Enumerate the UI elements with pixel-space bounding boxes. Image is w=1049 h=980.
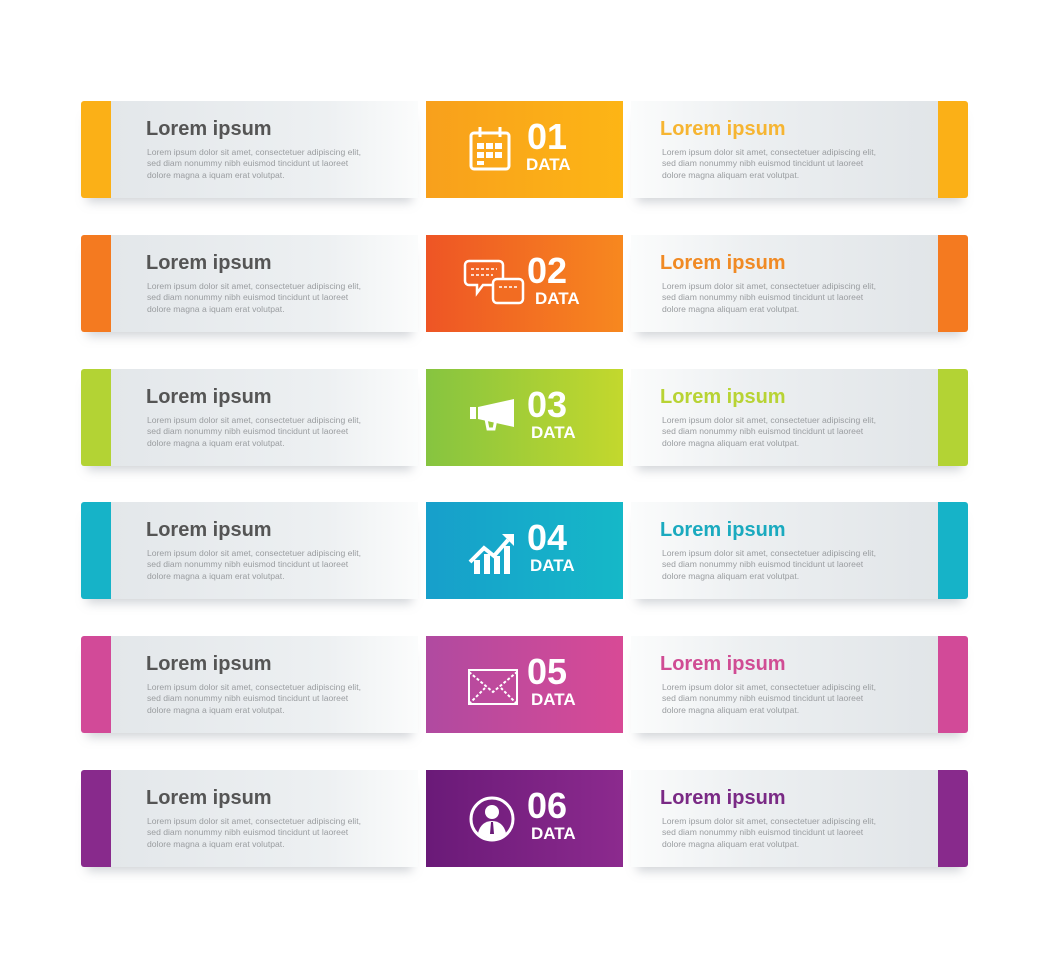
- panel: left 06: Lorem ipsum dolor sit amet, consectetuer adipiscing elit,: [147, 816, 361, 826]
- panel: left 04: [81, 502, 418, 599]
- center: 03: DATA: [531, 423, 576, 442]
- panel: right 06: Lorem ipsum dolor sit amet, consectetuer adipiscing elit,: [662, 816, 876, 826]
- panel: left 06: Lorem ipsum: [146, 787, 272, 809]
- panel: left 05: Lorem ipsum: [146, 653, 272, 675]
- panel: left 03: [81, 369, 418, 466]
- panel: left 03: Lorem ipsum: [146, 386, 272, 408]
- row 03: [81, 369, 968, 475]
- panel: left 06: [81, 770, 418, 867]
- center: 02: 02: [527, 250, 567, 291]
- center: 05: DATA: [531, 690, 576, 709]
- icon: envelope: [468, 669, 518, 705]
- panel: left 02: [81, 235, 418, 332]
- panel: right 03: [631, 369, 968, 466]
- panel: right 01: sed diam nonummy nibh euismod tincidunt ut laoreet: [662, 158, 863, 168]
- row 01: [81, 101, 968, 207]
- row 02: [81, 235, 968, 341]
- panel: right 05: Lorem ipsum dolor sit amet, consectetuer adipiscing elit,: [662, 682, 876, 692]
- panel: left 01: dolore magna a iquam erat volutpat.: [147, 170, 285, 180]
- panel: right 04: sed diam nonummy nibh euismod tincidunt ut laoreet: [662, 559, 863, 569]
- panel: right 03: Lorem ipsum: [660, 386, 786, 408]
- panel: right 05: [631, 636, 968, 733]
- panel: right 05: Lorem ipsum: [660, 653, 786, 675]
- panel: left 04: Lorem ipsum dolor sit amet, consectetuer adipiscing elit,: [147, 548, 361, 558]
- panel: left 01: Lorem ipsum: [146, 118, 272, 140]
- panel: right 03: Lorem ipsum dolor sit amet, consectetuer adipiscing elit,: [662, 415, 876, 425]
- row 04: [81, 502, 968, 608]
- center: 04: 04: [527, 517, 567, 558]
- panel: left 02: dolore magna a iquam erat volutpat.: [147, 304, 285, 314]
- panel: left 02: sed diam nonummy nibh euismod tincidunt ut laoreet: [147, 292, 348, 302]
- center: 06: DATA: [531, 824, 576, 843]
- center: 03: 03: [527, 384, 567, 425]
- panel: right 03: dolore magna aliquam erat volutpat.: [662, 438, 799, 448]
- center: 02: [426, 235, 623, 332]
- panel: right 01: Lorem ipsum dolor sit amet, consectetuer adipiscing elit,: [662, 147, 876, 157]
- panel: left 05: [81, 636, 418, 733]
- center: 04: DATA: [530, 556, 575, 575]
- row 06: [81, 770, 968, 876]
- icon: chat bubbles: [464, 260, 524, 304]
- panel: left 04: Lorem ipsum: [146, 519, 272, 541]
- center: 05: [426, 636, 623, 733]
- panel: right 06: dolore magna aliquam erat volutpat.: [662, 839, 799, 849]
- panel: left 01: sed diam nonummy nibh euismod tincidunt ut laoreet: [147, 158, 348, 168]
- panel: right 02: dolore magna aliquam erat volutpat.: [662, 304, 799, 314]
- center: 05: 05: [527, 651, 567, 692]
- panel: left 02: Lorem ipsum dolor sit amet, consectetuer adipiscing elit,: [147, 281, 361, 291]
- panel: right 01: [631, 101, 968, 198]
- row 05: [81, 636, 968, 742]
- panel: right 02: sed diam nonummy nibh euismod tincidunt ut laoreet: [662, 292, 863, 302]
- panel: right 05: sed diam nonummy nibh euismod tincidunt ut laoreet: [662, 693, 863, 703]
- panel: left 04: dolore magna a iquam erat volutpat.: [147, 571, 285, 581]
- panel: right 04: Lorem ipsum: [660, 519, 786, 541]
- panel: right 04: [631, 502, 968, 599]
- panel: right 01: dolore magna aliquam erat volutpat.: [662, 170, 799, 180]
- panel: right 01: Lorem ipsum: [660, 118, 786, 140]
- panel: left 05: dolore magna a iquam erat volutpat.: [147, 705, 285, 715]
- center: 03: [426, 369, 623, 466]
- panel: left 03: dolore magna a iquam erat volutpat.: [147, 438, 285, 448]
- center: 06: 06: [527, 785, 567, 826]
- panel: left 01: [81, 101, 418, 198]
- center: 02: DATA: [535, 289, 580, 308]
- panel: left 02: Lorem ipsum: [146, 252, 272, 274]
- panel: right 05: dolore magna aliquam erat volutpat.: [662, 705, 799, 715]
- panel: right 04: Lorem ipsum dolor sit amet, consectetuer adipiscing elit,: [662, 548, 876, 558]
- panel: right 06: [631, 770, 968, 867]
- icon: growth chart: [468, 534, 514, 574]
- panel: right 06: sed diam nonummy nibh euismod tincidunt ut laoreet: [662, 827, 863, 837]
- panel: left 05: Lorem ipsum dolor sit amet, consectetuer adipiscing elit,: [147, 682, 361, 692]
- panel: right 02: Lorem ipsum: [660, 252, 786, 274]
- icon: megaphone: [470, 399, 514, 430]
- icon: calendar: [470, 127, 510, 170]
- panel: right 04: dolore magna aliquam erat volutpat.: [662, 571, 799, 581]
- center: 06: [426, 770, 623, 867]
- panel: right 02: [631, 235, 968, 332]
- center: 01: DATA: [526, 155, 571, 174]
- panel: left 03: Lorem ipsum dolor sit amet, consectetuer adipiscing elit,: [147, 415, 361, 425]
- panel: left 05: sed diam nonummy nibh euismod tincidunt ut laoreet: [147, 693, 348, 703]
- panel: right 06: Lorem ipsum: [660, 787, 786, 809]
- panel: right 03: sed diam nonummy nibh euismod tincidunt ut laoreet: [662, 426, 863, 436]
- center: 04: [426, 502, 623, 599]
- panel: left 06: dolore magna a iquam erat volutpat.: [147, 839, 285, 849]
- icon: businessman: [470, 796, 514, 842]
- center: 01: [426, 101, 623, 198]
- panel: left 04: sed diam nonummy nibh euismod tincidunt ut laoreet: [147, 559, 348, 569]
- panel: right 02: Lorem ipsum dolor sit amet, consectetuer adipiscing elit,: [662, 281, 876, 291]
- panel: left 01: Lorem ipsum dolor sit amet, consectetuer adipiscing elit,: [147, 147, 361, 157]
- center: 01: 01: [527, 116, 567, 157]
- panel: left 06: sed diam nonummy nibh euismod tincidunt ut laoreet: [147, 827, 348, 837]
- panel: left 03: sed diam nonummy nibh euismod tincidunt ut laoreet: [147, 426, 348, 436]
